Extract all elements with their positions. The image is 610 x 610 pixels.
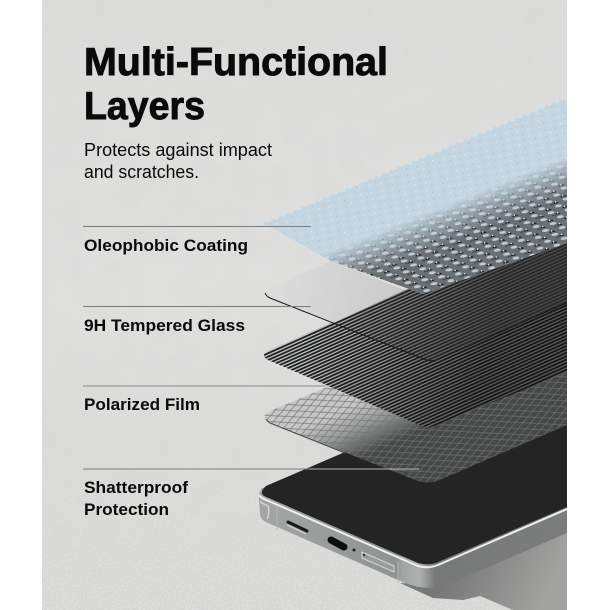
label: polarized film: Polarized Film [84, 395, 200, 414]
striped film [264, 240, 567, 427]
label: shatterproof protection [84, 478, 188, 519]
phone cast shadow [400, 530, 567, 610]
diamond film edge [266, 419, 345, 453]
diamond film [264, 370, 567, 483]
illustration: phone [258, 425, 567, 588]
stripe shading [305, 243, 567, 427]
tinted glass over film [333, 241, 567, 361]
subtitle: Protects against impact [84, 139, 272, 160]
dimple texture [322, 160, 567, 294]
diamond lattice [264, 370, 567, 483]
title [84, 41, 388, 128]
label: shatterproof protection: Shatterproof [84, 478, 188, 497]
title: Multi-Functional [84, 41, 388, 84]
label: 9H tempered glass: 9H Tempered Glass [84, 316, 245, 335]
illustration: polarized film layer [264, 240, 567, 427]
callout lines [83, 226, 419, 470]
illustration: tempered glass layer [265, 241, 567, 361]
phone screen [262, 425, 567, 564]
scalloped edge [266, 99, 567, 224]
blue surface dots [265, 99, 567, 294]
SIM tray [362, 552, 394, 572]
illustration: shatterproof protection layer [264, 370, 567, 483]
title: Layers [84, 85, 205, 128]
antenna bands [277, 507, 398, 583]
glass edge [265, 293, 567, 361]
side button [260, 502, 269, 519]
phone frame highlight [259, 495, 567, 567]
label: shatterproof protection: Protection [84, 500, 169, 519]
illustration: oleophobic coating layer [265, 99, 567, 294]
blue coating sheet [265, 99, 567, 294]
subtitle [84, 139, 272, 182]
subtitle: and scratches. [84, 161, 199, 182]
USB-C port [331, 540, 344, 547]
phone body [258, 488, 567, 588]
clear glass corner [308, 262, 405, 322]
microphone hole [352, 548, 356, 552]
label: oleophobic coating: Oleophobic Coating [84, 236, 248, 255]
speaker slot [288, 522, 307, 531]
